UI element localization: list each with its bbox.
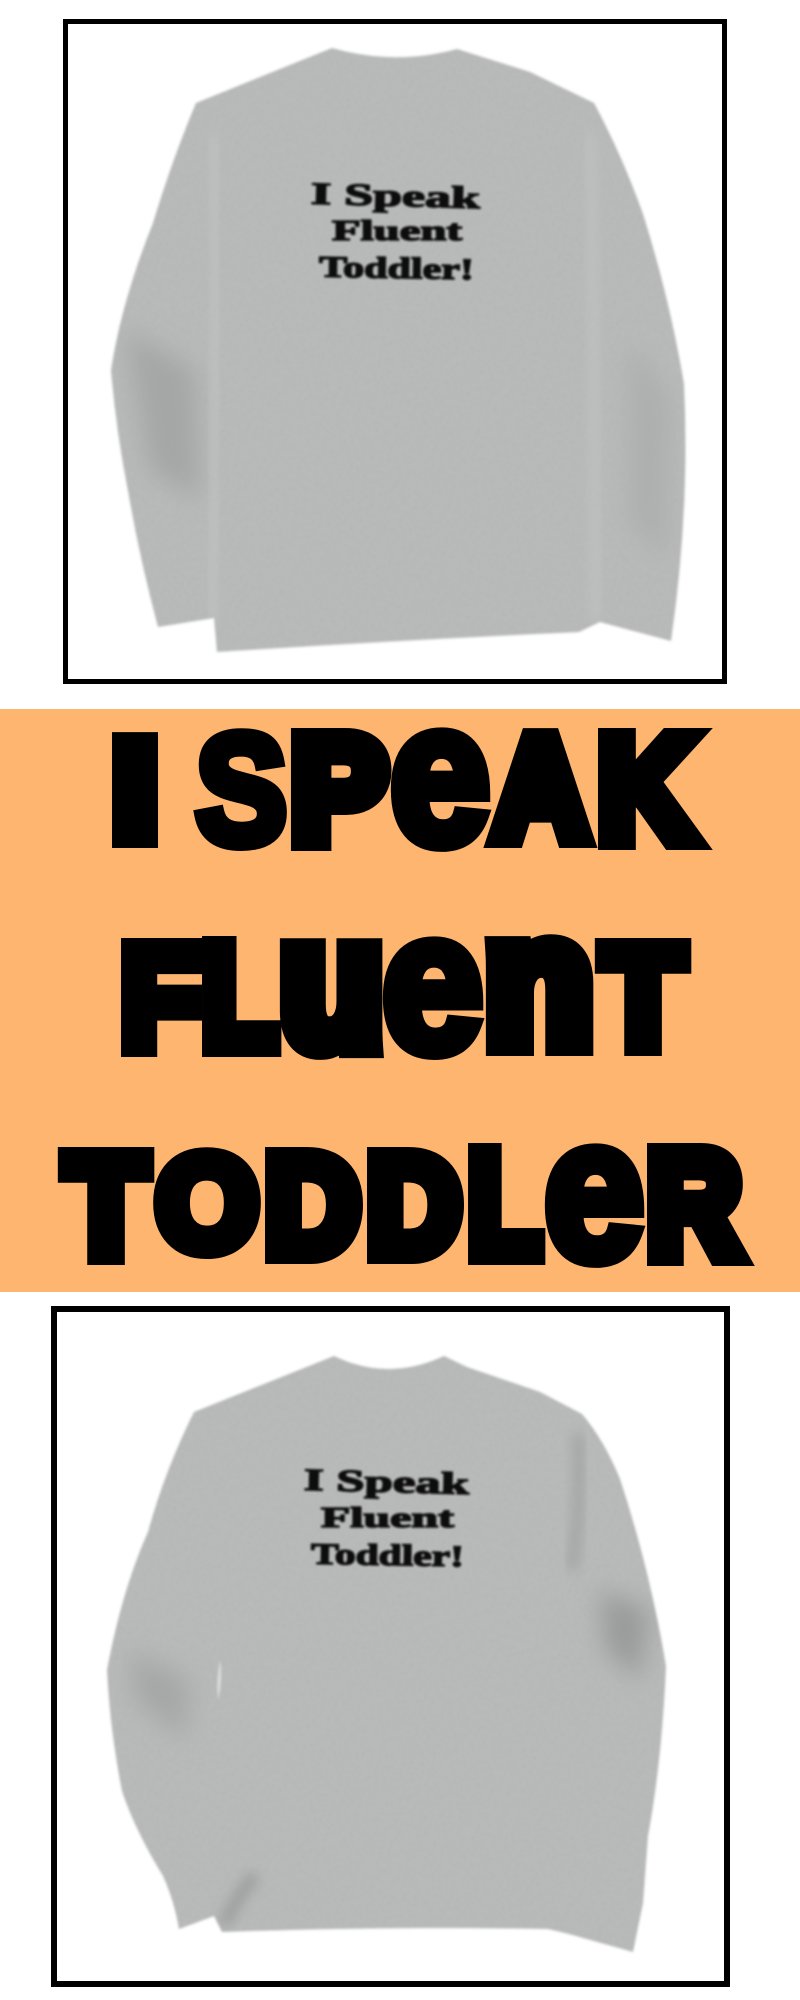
headline line 1: I SPeAK [112, 661, 695, 886]
illustration: long sleeve t-shirt [111, 48, 685, 652]
shirt print: I Speak Fluent Toddler!: Toddler! [319, 251, 474, 286]
shirt print: I Speak Fluent Toddler!: Fluent [321, 1502, 455, 1534]
headline line 3: TODDLeR: L [468, 1122, 541, 1287]
headline line 2: FLuenT: e [382, 871, 483, 1094]
headline line 3: TODDLeR: e [544, 1077, 644, 1302]
headline line 1: I SPeAK: e [390, 661, 490, 886]
headline line 1: I SPeAK: S [196, 703, 287, 876]
headline line 1: I SPeAK: I [112, 712, 158, 869]
headline line 2: FLuenT: L [202, 915, 277, 1078]
illustration: crewneck sweatshirt [107, 1356, 666, 1952]
headline line 3: TODDLeR: R [647, 1121, 741, 1288]
photo panel: crewneck sweatshirt [54, 1309, 727, 1984]
shirt print: I Speak Fluent Toddler!: I Speak [311, 176, 482, 215]
frame: black border [54, 1309, 727, 1984]
headline line 2: FLuenT: T [603, 918, 683, 1077]
headline line 1: I SPeAK: A [493, 708, 588, 869]
shirt print: I Speak Fluent Toddler! [304, 1462, 471, 1573]
headline line 3: TODDLeR: D [265, 1126, 359, 1284]
headline line 2: FLuenT: F [121, 917, 199, 1078]
headline line 2: FLuenT [121, 871, 683, 1094]
shirt print: I Speak Fluent Toddler!: Fluent [332, 215, 463, 247]
frame: black border [66, 22, 724, 682]
shirt print: I Speak Fluent Toddler!: Toddler! [311, 1538, 464, 1573]
headline line 3: TODDLeR: T [66, 1127, 146, 1286]
title banner: orange background with headline [0, 661, 800, 1302]
headline line 2: FLuenT: n [486, 882, 592, 1082]
headline line 2: FLuenT: u [281, 883, 382, 1084]
shirt print: I Speak Fluent Toddler! [311, 176, 482, 286]
headline line 3: TODDLeR [66, 1077, 741, 1302]
headline line 3: TODDLeR: D [367, 1127, 460, 1284]
headline line 1: I SPeAK: K [598, 706, 695, 871]
photo panel: long sleeve shirt [66, 22, 724, 682]
gap between sleeve and body [217, 1660, 221, 1700]
headline line 1: I SPeAK: P [291, 706, 386, 872]
banner background [0, 709, 800, 1292]
headline line 3: TODDLeR: O [157, 1129, 257, 1277]
shirt print: I Speak Fluent Toddler!: I Speak [304, 1462, 471, 1501]
